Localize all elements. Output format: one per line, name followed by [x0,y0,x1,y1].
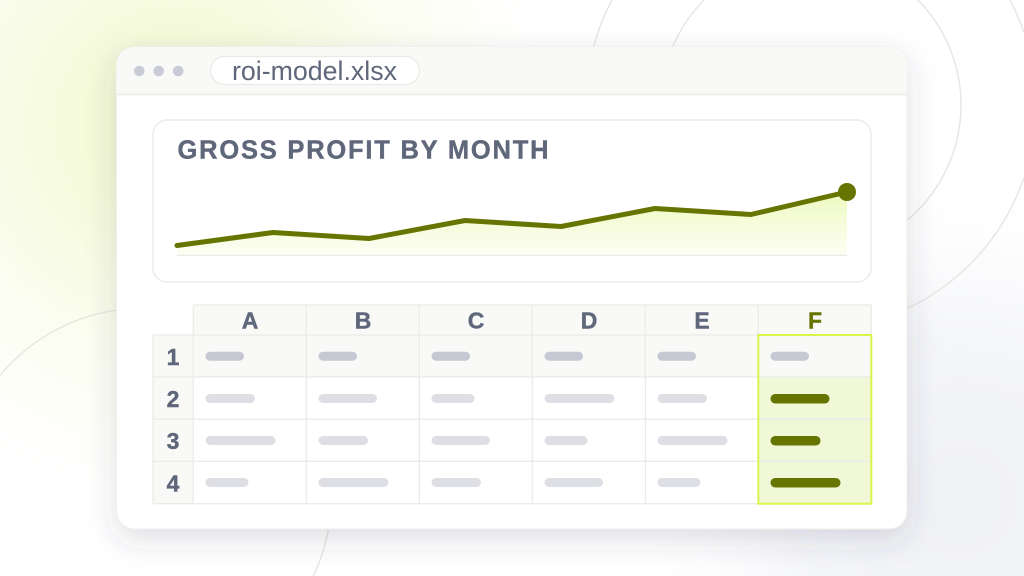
column headers: D [581,308,597,334]
rows 2 to 4 placeholder bars [206,394,728,487]
highlight border column F [758,335,871,504]
row headers [167,344,180,496]
grid lines [153,305,871,504]
file name pill: roi-model.xlsx [232,56,397,86]
column headers: B [355,308,371,334]
window body [116,47,907,529]
chart title: GROSS PROFIT BY MONTH [178,136,548,164]
row headers: 3 [167,428,179,454]
highlighted cells fill [758,377,871,504]
header and row 1 fills [153,305,871,504]
panel: spreadsheet window [116,47,907,529]
column headers: C [468,308,484,334]
column headers: E [694,308,710,334]
spreadsheet table [153,305,871,504]
panel: gross profit chart [153,120,871,282]
row headers: 4 [167,470,180,496]
row headers: 2 [167,386,179,412]
column headers: A [242,308,258,334]
column headers: F [808,308,822,334]
line chart [177,183,856,255]
row 1 placeholder bars [206,352,809,361]
column headers [242,308,822,334]
row headers: 1 [167,344,180,370]
window control dots [134,66,184,76]
window title bar [116,47,907,96]
highlighted column F bars [770,394,840,488]
background circle, bottom left [0,308,330,576]
background concentric circles, top right [590,0,1024,319]
